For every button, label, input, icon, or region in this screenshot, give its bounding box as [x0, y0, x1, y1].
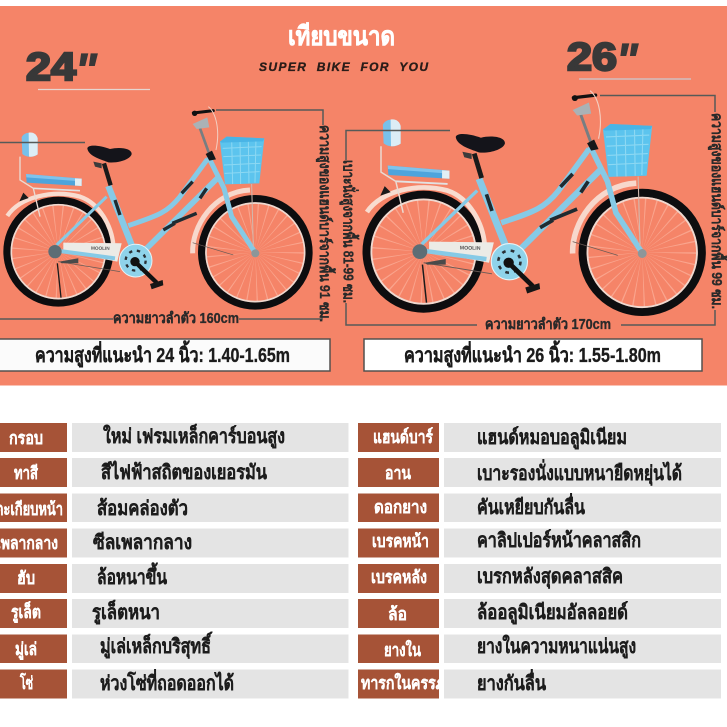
row labels: เบรคหลัง	[371, 567, 427, 587]
dimension lines: 26 inch	[346, 96, 715, 325]
row labels: ทาสี	[14, 463, 38, 483]
row labels	[0, 428, 63, 693]
row values: ห่วงโซ่ที่ถอดออกได้	[100, 668, 234, 695]
size label: 26 inch: "	[616, 34, 639, 86]
row values: คันเหยียบกันลื่น	[477, 492, 585, 519]
size label: 24 inch: 24	[26, 46, 76, 89]
row values: คาลิปเปอร์หน้าคลาสสิก	[477, 529, 641, 552]
length label: 24 inch: ความยาวลำตัว 160cm	[113, 310, 239, 327]
row values: ล้ออลูมิเนียมอัลลอยด์	[477, 601, 628, 626]
recommended height box: 24 inch: ความสูงที่แนะนำ 24 นิ้ว: 1.40-1.65m	[35, 340, 290, 369]
label cells	[358, 423, 439, 698]
row labels: กรอบ	[9, 428, 43, 448]
row values: ยางในความหนาแน่นสูง	[477, 634, 636, 660]
bicycle: 26 inch: MOOLIN	[460, 245, 481, 252]
row values	[477, 426, 682, 695]
recommended height box: 24 inch	[0, 339, 330, 371]
recommended height box: 26 inch	[364, 339, 702, 371]
row labels: อาน	[385, 463, 411, 483]
bicycle: 24 inch: MOOLIN	[91, 246, 110, 251]
row values: มู่เล่เหล็กบริสุทธิ์	[100, 631, 213, 660]
row values: ยางกันลื่น	[477, 668, 546, 695]
size label: 24 inch	[26, 44, 150, 96]
row labels	[361, 426, 445, 693]
spec table: left column	[0, 423, 348, 698]
row values: ใหม่ เฟรมเหล็กคาร์บอนสูง	[103, 423, 285, 450]
vertical label: 24 inch handlebar height: ความสูงของแฮนด์บาร์จากพื้น 91 ซม.	[316, 125, 336, 322]
subtitle: SUPER BIKE FOR YOU	[259, 60, 428, 74]
value cells	[72, 423, 348, 698]
bicycle: 24 inch	[7, 107, 309, 306]
row values: ล้อหนาขึ้น	[97, 562, 167, 589]
row labels: โซ่	[19, 672, 33, 693]
size label: 26 inch: 26	[567, 36, 617, 79]
spec table: right column	[358, 423, 721, 698]
row values	[92, 423, 285, 695]
row labels: ฮับ	[17, 568, 35, 588]
row labels: เบรคหน้า	[372, 531, 429, 551]
recommended height box: 26 inch: ความสูงที่แนะนำ 26 นิ้ว: 1.55-1.80m	[404, 340, 661, 369]
vertical label: seat height: เบาะนั่งสูงจากพื้น 81-99 ซม.	[340, 160, 360, 303]
value cells	[444, 423, 721, 698]
row labels: ล้อ	[388, 604, 407, 624]
row values: แฮนด์หมอบอลูมิเนียม	[477, 426, 627, 451]
row values: ส้อมคล่องตัว	[97, 497, 188, 520]
length label: 26 inch: ความยาวลำตัว 170cm	[485, 316, 611, 333]
size label: 24 inch: "	[75, 44, 98, 96]
size label: 26 inch	[567, 34, 691, 86]
title: เทียบขนาด	[288, 21, 395, 51]
row labels: ทารกในครรภ์	[361, 672, 445, 693]
dimension lines: 24 inch	[0, 110, 323, 319]
row labels: แฮนด์บาร์	[373, 426, 433, 447]
vertical label: 26 inch handlebar height: ความสูงของแฮนด์บาร์จากพื้น 99 ซม.	[708, 113, 727, 309]
bicycle: 26 inch	[367, 91, 702, 312]
row values: เบรกหลังสุดคลาสสิค	[477, 566, 623, 589]
row labels: ดอกยาง	[374, 497, 427, 517]
panel: size comparison	[0, 6, 727, 386]
row labels: ยางใน	[384, 639, 421, 660]
row labels: รูเล็ต	[11, 600, 41, 624]
row labels: มู่เล่	[15, 639, 37, 661]
row values: สีไฟฟ้าสถิตของเยอรมัน	[101, 460, 267, 484]
row values: ซีลเพลากลาง	[93, 531, 192, 554]
row values: รูเล็ตหนา	[92, 599, 160, 626]
label cells	[0, 423, 67, 698]
